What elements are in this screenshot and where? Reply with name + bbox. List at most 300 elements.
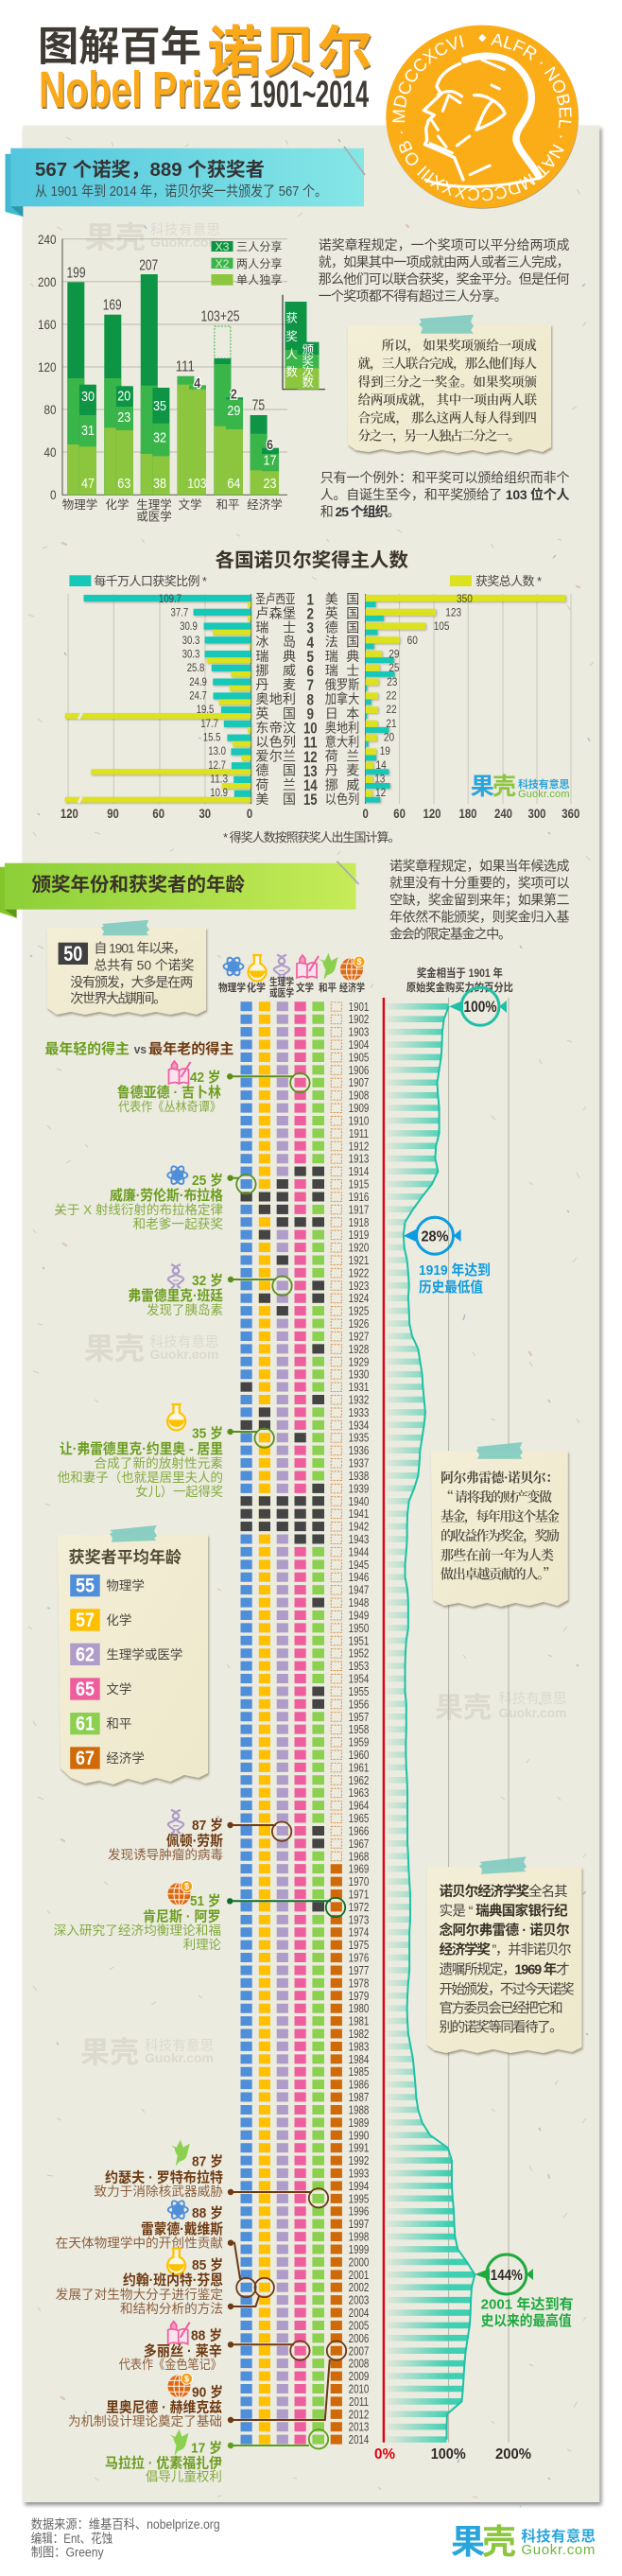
callout: 144%: 2001 年达到有 xyxy=(481,2296,574,2313)
logo: guokr footer: 科技有意思 xyxy=(521,2527,596,2545)
right totals xyxy=(374,592,473,799)
left rates: 15.5 xyxy=(203,730,221,743)
text block: peace prize exception: 和 25 个组织。 xyxy=(320,504,401,519)
ranks: 9 xyxy=(307,705,314,722)
legend: rate: 每千万人口获奖比例 * xyxy=(94,574,207,588)
left countries: 挪威 xyxy=(255,663,296,678)
right bars xyxy=(366,595,565,803)
y axis labels: 120 xyxy=(38,359,57,374)
year labels: 1929 xyxy=(349,1356,369,1369)
credits: 数据来源：维基百科、nobelprize.org xyxy=(31,2516,220,2532)
year labels: 2012 xyxy=(349,2409,369,2422)
right countries: 挪威 xyxy=(325,777,359,792)
category labels: 物理学 xyxy=(62,497,97,512)
right countries xyxy=(325,591,359,807)
age: physics: 55 xyxy=(76,1575,95,1597)
credits xyxy=(31,2516,220,2559)
right totals: 350 xyxy=(457,592,473,605)
credits: 编辑：Ent、花蚀 xyxy=(31,2532,112,2546)
bar totals: 207 xyxy=(139,257,158,273)
year labels: 1937 xyxy=(349,1458,369,1471)
logo: guokr footer: 果 xyxy=(451,2522,485,2561)
bar values: 31 xyxy=(81,423,95,439)
callout: bragg: 25 岁 xyxy=(192,1172,223,1189)
year labels: 1979 xyxy=(349,1991,369,2003)
callout: banting: 弗雷德里克·班廷 xyxy=(128,1287,223,1304)
year labels: 1956 xyxy=(349,1698,369,1712)
age: chemistry: 57 xyxy=(76,1610,95,1631)
year labels: 1975 xyxy=(349,1940,369,1952)
note card: nobel's will xyxy=(431,1442,568,1607)
note card: 50 prizes not awarded: 自 1901 年以来， xyxy=(94,941,186,956)
legend: 两人分享 xyxy=(236,256,282,270)
bar values: 2 xyxy=(231,387,237,403)
year labels: 1941 xyxy=(349,1508,369,1522)
year labels: 1964 xyxy=(349,1801,369,1813)
year labels: 1916 xyxy=(349,1192,369,1204)
heading: youngest vs oldest xyxy=(44,1040,233,1057)
note card: economics prize: 实是 “ 瑞典国家银行纪 xyxy=(440,1903,568,1920)
callout: arrow: 51 岁 xyxy=(190,1892,221,1909)
callout: 28%: 28% xyxy=(422,1229,448,1245)
ranks: 13 xyxy=(303,762,318,780)
year labels: 1936 xyxy=(349,1445,369,1457)
callout: fenn: 发展了对生物大分子进行鉴定 xyxy=(56,2288,223,2302)
note card: economics prize: 开始颁发，不过今天诺奖 xyxy=(440,1982,575,1997)
axis ticks: 30 xyxy=(199,806,211,821)
percent axis xyxy=(374,2446,531,2463)
callout: arrow: 肯尼斯 · 阿罗 xyxy=(143,1908,221,1925)
note card: nobel's will: 阿尔弗雷德·诺贝尔： xyxy=(441,1468,559,1487)
column icons and labels: 或医学 xyxy=(269,985,294,999)
yearly bars xyxy=(386,1003,475,2444)
ranks: 3 xyxy=(307,619,314,637)
left countries: 卢森堡 xyxy=(255,605,296,620)
column icons and labels: 文学 xyxy=(296,981,314,994)
year labels: 1963 xyxy=(349,1787,369,1801)
year labels: 1922 xyxy=(349,1267,369,1280)
callout: 144%: 史以来的最高值 xyxy=(481,2312,572,2329)
right countries: 美国 xyxy=(325,591,359,606)
callout: kipling: 代表作《丛林奇谭》 xyxy=(118,1099,221,1114)
bar values: 6 xyxy=(267,437,273,453)
year labels: 1909 xyxy=(349,1103,369,1115)
column: economics xyxy=(331,1864,342,2445)
note card: nobel's will: 那些在前一年为人类 xyxy=(441,1545,554,1564)
text block: vacant prize rule: 空缺，奖金留到来年；如果第二 xyxy=(389,893,569,908)
year labels: 1966 xyxy=(349,1825,369,1838)
left countries: 冰岛 xyxy=(255,635,296,650)
legend: X3 xyxy=(216,240,230,253)
text block: charter rule xyxy=(319,237,569,304)
logo: guokr footer xyxy=(451,2522,596,2561)
y axis labels: 80 xyxy=(43,402,57,417)
year labels: 1935 xyxy=(349,1433,369,1445)
callout: 28% xyxy=(404,1217,491,1296)
callout: fenn: 和结构分析的方法 xyxy=(120,2302,223,2316)
right countries: 日本 xyxy=(325,705,359,721)
right countries: 奥地利 xyxy=(325,720,359,735)
axis ticks: 0 xyxy=(247,806,252,821)
y axis labels: 40 xyxy=(43,444,57,460)
year labels: 1961 xyxy=(349,1762,369,1775)
text block: vacant prize rule xyxy=(389,859,569,942)
age: medicine: 62 xyxy=(76,1644,95,1665)
callout: lessing: 代表作《金色笔记》 xyxy=(119,2357,222,2372)
year labels: 1954 xyxy=(349,1673,369,1686)
bar values: 47 xyxy=(81,476,95,492)
right totals: 20 xyxy=(384,730,394,743)
left bars xyxy=(65,595,251,803)
callout: banting: 发现了胰岛素 xyxy=(147,1303,223,1317)
age: medicine: 生理学或医学 xyxy=(106,1647,182,1662)
note card: economics prize: 诺贝尔经济学奖全名其 xyxy=(440,1883,568,1900)
right countries: 英国 xyxy=(325,605,359,620)
ribbon: 567 prizes xyxy=(6,147,365,218)
age: physics xyxy=(70,1575,145,1597)
note card: economics prize: 遗嘱所规定，1969 年才 xyxy=(440,1961,570,1978)
ranks: 14 xyxy=(303,776,318,794)
note card: nobel's will: 的收益作为奖金，奖励 xyxy=(441,1526,560,1545)
right totals: 123 xyxy=(445,605,461,618)
y axis labels: 160 xyxy=(38,317,57,332)
year labels: 1917 xyxy=(349,1204,369,1217)
y axis labels: 0 xyxy=(50,487,57,502)
mini key bars: 获 xyxy=(285,312,298,325)
left rates: 17.7 xyxy=(200,717,218,730)
year labels: 2010 xyxy=(349,2383,369,2396)
bar values: 29 xyxy=(227,403,240,419)
text block: vacant prize rule: 诺奖章程规定，如果当年候选成 xyxy=(389,859,569,874)
heading: youngest vs oldest: 最年老的得主 xyxy=(148,1040,233,1057)
category labels: 和平 xyxy=(216,498,240,512)
left countries: 德国 xyxy=(255,763,296,778)
year labels: 2000 xyxy=(349,2256,369,2270)
year labels: 1958 xyxy=(349,1724,369,1737)
bars: medicine xyxy=(141,274,169,495)
right totals: 23 xyxy=(387,675,398,688)
callout: 28%: 历史最低值 xyxy=(419,1279,483,1296)
title: Nobel Prize xyxy=(39,61,241,118)
axis ticks: 60 xyxy=(393,806,406,821)
column: chemistry xyxy=(259,1001,270,2445)
callout: joliot-curie: 他和妻子（也就是居里夫人的 xyxy=(58,1471,223,1485)
logo: guokr footer: 壳 xyxy=(482,2522,516,2561)
year labels: 2001 xyxy=(349,2270,369,2282)
prize year matrix xyxy=(240,998,509,2446)
note card: economics prize: 经济学奖 ”，并非诺贝尔 xyxy=(440,1941,572,1958)
year labels: 1948 xyxy=(349,1597,369,1610)
callout: malala: 17 岁 xyxy=(191,2439,222,2456)
year labels: 1919 xyxy=(349,1229,369,1243)
left rates: 11.3 xyxy=(210,772,228,785)
callout: rotblat xyxy=(94,2140,328,2207)
bars: literature xyxy=(177,376,206,495)
note card: how the money splits: 所以， 如果奖项颁给一项成 xyxy=(382,335,537,354)
year labels: 2014 xyxy=(349,2434,369,2446)
ranks: 1 xyxy=(307,590,314,609)
watermark: guokr lower left: Guokr.com xyxy=(145,2050,214,2065)
year labels: 1902 xyxy=(349,1014,369,1027)
note card: 50 prizes not awarded: 总共有 50 个诺奖 xyxy=(94,957,194,972)
left countries: 英国 xyxy=(255,705,296,721)
callout: rotblat: 约瑟夫 · 罗特布拉特 xyxy=(105,2169,223,2186)
watermark: guokr top: 科技有意思 xyxy=(150,221,220,238)
callout: hurwicz: 90 岁 xyxy=(192,2383,223,2400)
legend: total: 获奖总人数 * xyxy=(475,574,542,588)
left countries: 奥地利 xyxy=(255,691,296,706)
callout: arrow: 深入研究了经济均衡理论和福 xyxy=(54,1923,221,1938)
note card: 50 prizes not awarded xyxy=(47,920,206,1015)
right countries: 荷兰 xyxy=(325,749,359,764)
right totals: 25 xyxy=(389,661,400,674)
year labels: 1903 xyxy=(349,1027,369,1039)
ranks xyxy=(303,590,318,809)
bar values: 63 xyxy=(117,476,130,492)
callout: arrow xyxy=(54,1881,345,1952)
year labels: 1901 xyxy=(349,1001,369,1014)
year labels: 2006 xyxy=(349,2333,369,2345)
age: chemistry: 化学 xyxy=(106,1613,131,1627)
mini key bars: 次 xyxy=(302,365,314,378)
logo: guokr in chart: 果 xyxy=(471,774,494,800)
callout: joliot-curie: 35 岁 xyxy=(192,1425,223,1442)
right countries: 法国 xyxy=(325,635,359,650)
callout: joliot-curie xyxy=(58,1404,274,1499)
callout: 28%: 1919 年达到 xyxy=(419,1262,491,1279)
bar values: 17 xyxy=(263,453,276,469)
column: literature xyxy=(295,1001,306,2445)
right totals: 22 xyxy=(386,688,397,702)
right countries: 俄罗斯 xyxy=(325,677,359,692)
mini key bars xyxy=(283,295,325,390)
ranks: 6 xyxy=(307,662,314,680)
chart: prize purchasing power xyxy=(374,966,574,2463)
callout: joliot-curie: 让·弗雷德里克·约里奥 - 居里 xyxy=(60,1440,223,1457)
bars: chemistry xyxy=(104,315,133,495)
curve xyxy=(404,1006,475,2440)
watermark: guokr top xyxy=(85,220,220,254)
callout: hurwicz: 为机制设计理论奠定了基础 xyxy=(68,2413,222,2428)
callout: bragg: 关于 X 射线衍射的布拉格定律 xyxy=(54,1203,223,1217)
year labels: 1947 xyxy=(349,1585,369,1597)
footnote: * 得奖人数按照获奖人出生国计算。 xyxy=(223,830,401,844)
legend: 单人独享 xyxy=(236,272,282,287)
left countries xyxy=(255,591,296,807)
year labels: 1907 xyxy=(349,1077,369,1090)
text block: charter rule: 就，如果其中一项成就由两人或者三人完成， xyxy=(319,254,569,270)
title: 1901~2014 xyxy=(250,74,369,115)
left rates: 24.7 xyxy=(189,688,207,702)
right countries: 瑞典 xyxy=(325,649,359,664)
column icons and labels: 经济学 xyxy=(339,981,365,994)
age: peace xyxy=(70,1713,131,1735)
year labels: 1995 xyxy=(349,2193,369,2206)
left countries: 荷兰 xyxy=(255,777,296,792)
year labels: 1932 xyxy=(349,1394,369,1407)
percent axis: 0% xyxy=(374,2446,395,2463)
right totals: 60 xyxy=(407,634,418,647)
note card: economics prize: 别的诺奖等同看待了。 xyxy=(440,2018,563,2035)
year labels: 1933 xyxy=(349,1407,369,1419)
year labels: 1970 xyxy=(349,1876,369,1888)
year labels: 1998 xyxy=(349,2232,369,2244)
note card: nobel's will: “ 请将我的财产变做 xyxy=(441,1488,552,1506)
year labels: 1973 xyxy=(349,1914,369,1927)
axis ticks: 180 xyxy=(459,806,477,821)
year labels: 1950 xyxy=(349,1623,369,1635)
year labels: 1977 xyxy=(349,1965,369,1977)
legend xyxy=(212,239,282,287)
y axis labels: 200 xyxy=(38,274,57,289)
right totals: 14 xyxy=(376,758,387,772)
category labels: 文学 xyxy=(178,497,202,512)
year labels: 1987 xyxy=(349,2092,369,2104)
bar values: 30 xyxy=(81,389,95,405)
text block: charter rule: 一个奖项都不得有超过三人分享。 xyxy=(319,288,508,304)
year labels: 1913 xyxy=(349,1154,369,1166)
year labels: 1997 xyxy=(349,2219,369,2232)
year labels: 1928 xyxy=(349,1344,369,1356)
right countries: 丹麦 xyxy=(325,763,359,778)
ranks: 8 xyxy=(307,690,314,708)
mini key bars: 数 xyxy=(285,365,298,378)
right totals: 105 xyxy=(434,619,450,633)
callout: davis: 在天体物理学中的开创性贡献 xyxy=(56,2236,223,2251)
bar totals: 111 xyxy=(176,358,195,374)
year labels: 1931 xyxy=(349,1382,369,1394)
ribbon: award years and ages xyxy=(0,862,359,918)
bar values: 35 xyxy=(153,398,166,414)
note card: 50 prizes not awarded: 没有颁发，大多是在两 xyxy=(70,974,193,989)
heading: 567 prizes: 567 个诺奖，889 个获奖者 xyxy=(35,159,265,181)
year labels: 1992 xyxy=(349,2155,369,2167)
ranks: 7 xyxy=(307,676,314,694)
callout: 144%: 144% xyxy=(491,2268,523,2284)
category labels: 化学 xyxy=(105,497,130,512)
bar values: 23 xyxy=(117,409,130,426)
year labels: 1991 xyxy=(349,2143,369,2155)
watermark: guokr lower left: 果壳 xyxy=(80,2036,139,2069)
y axis labels xyxy=(38,232,57,502)
mini key bars: 人 xyxy=(285,348,298,361)
year labels: 1925 xyxy=(349,1306,369,1318)
left rates: 24.9 xyxy=(189,675,207,688)
note card: average age xyxy=(58,1525,208,1784)
bars: economics xyxy=(251,415,279,495)
column: medicine xyxy=(277,1001,288,2445)
age: chemistry xyxy=(70,1609,131,1631)
bar totals: 75 xyxy=(252,397,265,413)
callout: banting: 32 岁 xyxy=(192,1272,223,1289)
title: 诺贝尔 xyxy=(207,22,372,83)
left rates: 109.7 xyxy=(159,592,181,605)
year labels: 1945 xyxy=(349,1559,369,1572)
year labels: 1918 xyxy=(349,1217,369,1229)
year labels: 2002 xyxy=(349,2282,369,2295)
mini key bars: 奖 xyxy=(302,355,314,368)
left rates: 10.9 xyxy=(210,786,228,799)
callout: lessing: 88 岁 xyxy=(191,2326,222,2343)
callout: bragg: 和老爹一起获奖 xyxy=(132,1216,223,1231)
left countries: 瑞典 xyxy=(255,649,296,664)
chart heading: 奖金相当于 1901 年 xyxy=(417,966,503,980)
axis ticks: 360 xyxy=(562,806,579,821)
year labels: 1906 xyxy=(349,1065,369,1077)
year labels: 1969 xyxy=(349,1864,369,1876)
age: literature: 65 xyxy=(76,1679,95,1700)
title: 图解百年 xyxy=(38,25,201,70)
bar totals: 103+25 xyxy=(200,308,240,324)
year labels: 1915 xyxy=(349,1179,369,1192)
heading: laureates by country: 各国诺贝尔奖得主人数 xyxy=(216,548,408,571)
watermark: guokr lower left: 科技有意思 xyxy=(145,2037,214,2054)
year labels: 1990 xyxy=(349,2130,369,2143)
year labels: 1960 xyxy=(349,1749,369,1762)
callout: 100%: 100% xyxy=(463,998,497,1016)
year labels: 1921 xyxy=(349,1255,369,1267)
heading: youngest vs oldest: vs xyxy=(134,1042,147,1056)
age: economics: 经济学 xyxy=(106,1751,145,1766)
year labels: 1912 xyxy=(349,1140,369,1154)
year labels: 2004 xyxy=(349,2307,369,2320)
bar values: 23 xyxy=(263,476,276,492)
mini key bars: 奖 xyxy=(285,330,298,343)
year labels: 2007 xyxy=(349,2345,369,2358)
right countries: 德国 xyxy=(325,620,359,635)
text block: vacant prize rule: 就里没有十分重要的，奖项可以 xyxy=(389,876,569,891)
heading: average age: 获奖者平均年龄 xyxy=(68,1547,181,1566)
note card: how the money splits: 就，三人联合完成，那么他们每人 xyxy=(358,353,537,372)
ranks: 10 xyxy=(303,720,318,738)
year labels: 1904 xyxy=(349,1039,369,1052)
note card: economics prize: 念阿尔弗雷德 · 诺贝尔 xyxy=(440,1922,570,1939)
bar values: 64 xyxy=(227,476,240,492)
year labels: 1999 xyxy=(349,2244,369,2256)
year labels: 1911 xyxy=(349,1128,369,1140)
age: physics: 物理学 xyxy=(106,1579,145,1593)
callout: lessing: 多丽丝 · 莱辛 xyxy=(144,2342,222,2359)
right totals: 29 xyxy=(389,647,400,660)
left countries: 美国 xyxy=(255,792,296,807)
bar values: 38 xyxy=(153,476,166,492)
year labels: 1981 xyxy=(349,2016,369,2028)
column: economics not yet created xyxy=(331,1001,342,1864)
text block: charter rule: 那么他们可以联合获奖，奖金平分。但是任何 xyxy=(319,271,569,287)
category labels xyxy=(62,497,283,524)
callout: rous xyxy=(108,1810,291,1862)
year labels: 2009 xyxy=(349,2371,369,2383)
callout: kipling: 鲁德亚德 · 吉卜林 xyxy=(117,1084,221,1101)
year labels: 1951 xyxy=(349,1635,369,1648)
year labels: 1980 xyxy=(349,2003,369,2016)
watermark: guokr middle right: Guokr.com xyxy=(499,1705,567,1720)
year labels: 1940 xyxy=(349,1496,369,1508)
left rates: 30.3 xyxy=(182,647,200,660)
left rates: 25.8 xyxy=(187,661,205,674)
callout: kipling: 42 岁 xyxy=(190,1069,221,1086)
year labels: 1930 xyxy=(349,1369,369,1382)
callout: arrow: 利理论 xyxy=(183,1938,221,1952)
year labels: 1920 xyxy=(349,1243,369,1255)
year labels: 2005 xyxy=(349,2320,369,2333)
year labels: 1934 xyxy=(349,1419,369,1433)
callout: banting xyxy=(128,1264,292,1317)
year labels: 2008 xyxy=(349,2358,369,2371)
age: economics xyxy=(70,1747,145,1769)
year labels: 1967 xyxy=(349,1838,369,1851)
left rates: 37.7 xyxy=(170,605,188,618)
